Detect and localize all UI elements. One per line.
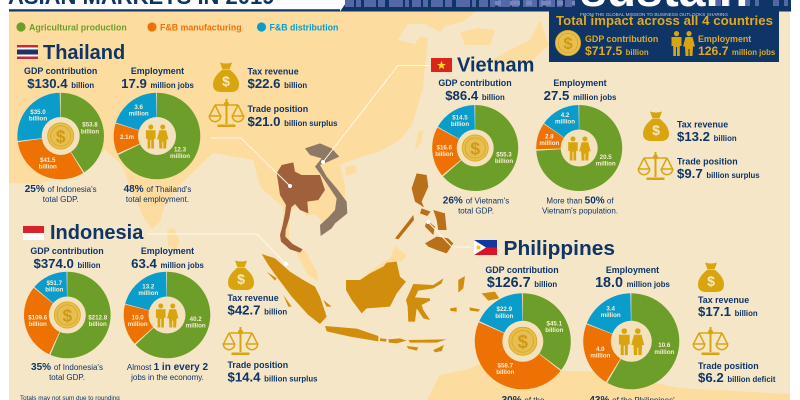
- employment label: Employment: [131, 66, 184, 76]
- tax revenue: $22.6: [248, 76, 284, 91]
- icon: money bag: [228, 260, 254, 290]
- donut labels: employment: 13.2: [142, 284, 154, 290]
- trade position: billion deficit: [727, 375, 776, 384]
- employment note: 48% of Thailand's: [124, 184, 191, 195]
- donut labels: GDP: billion: [435, 151, 454, 158]
- GDP value: $126.7 billion: [487, 275, 557, 291]
- GDP note: 26% of Vietnam's: [443, 196, 509, 206]
- legend: [16, 22, 338, 32]
- donut labels: GDP: $212.8: [88, 314, 107, 322]
- donut labels: employment: 3.4: [606, 306, 615, 312]
- map: Sri Lanka, Hainan and Taiwan: [167, 130, 423, 250]
- skyline: [345, 0, 788, 7]
- trade position: billion surplus: [706, 171, 760, 180]
- tax revenue: $13.2: [677, 129, 714, 144]
- trade position: billion surplus: [284, 119, 338, 128]
- flag: Indonesia: [23, 226, 44, 240]
- donut: employment: [124, 272, 210, 358]
- panel: Philippines: [474, 238, 776, 400]
- donut labels: employment: 10.6: [658, 342, 670, 349]
- donut labels: GDP: $35.0: [30, 109, 46, 116]
- tax revenue: $17.1: [698, 304, 735, 319]
- donut: GDP: [17, 93, 104, 179]
- leader lines: [147, 66, 470, 266]
- icon: coin: [555, 30, 581, 56]
- icon: money bag: [698, 262, 724, 292]
- donut: employment: [114, 93, 200, 179]
- employment note: total employment.: [126, 195, 189, 204]
- donut labels: employment: million: [555, 119, 575, 126]
- donut labels: GDP: $55.3: [496, 152, 512, 158]
- donut labels: GDP: $22.9: [497, 306, 512, 313]
- donut labels: employment: 4.2: [561, 112, 569, 119]
- donut labels: GDP: billion: [29, 116, 47, 122]
- donut labels: GDP: billion: [451, 121, 469, 128]
- total GDP value: $717.5 billion: [585, 44, 649, 58]
- employment value: 17.9 million jobs: [121, 76, 194, 91]
- GDP note: 35% of Indonesia's: [31, 362, 103, 373]
- trade position: Trade position: [698, 361, 759, 371]
- trade position: $21.0: [248, 114, 284, 129]
- icon: money bag: [643, 112, 669, 141]
- heading: Indonesia: Indonesia: [50, 222, 144, 244]
- donut labels: employment: million: [654, 349, 674, 356]
- tax revenue: Tax revenue: [228, 293, 279, 303]
- donut: GDP: [475, 293, 571, 389]
- donut labels: GDP: billion: [81, 128, 99, 135]
- donut labels: GDP: $53.8: [82, 122, 98, 128]
- donut labels: GDP: billion: [495, 313, 514, 320]
- donut labels: GDP: billion: [496, 369, 515, 376]
- icon: scale: [693, 327, 728, 355]
- donut labels: employment: million: [128, 321, 148, 328]
- donut labels: employment: 10.0: [132, 314, 144, 322]
- icon: people: [672, 31, 695, 56]
- map: Thailand: [277, 162, 325, 253]
- map: Australia: [427, 356, 790, 400]
- trade position: Trade position: [248, 104, 308, 114]
- donut labels: GDP: [28, 280, 108, 328]
- donut labels: employment: 4.0: [596, 346, 605, 353]
- total GDP: GDP contribution: [585, 34, 658, 44]
- donut: employment: [583, 293, 679, 389]
- donut: GDP: [432, 105, 518, 191]
- trade position: $9.7: [677, 166, 706, 181]
- map: Philippines: [395, 173, 453, 253]
- donut labels: GDP: $41.5: [40, 157, 55, 164]
- donut labels: employment: [120, 104, 190, 160]
- legend: F&B manufacturing: [160, 22, 242, 32]
- employment note: jobs in the economy.: [130, 373, 204, 382]
- GDP note: total GDP.: [458, 206, 494, 216]
- map: Korea and Japan: [460, 20, 549, 64]
- donut labels: GDP: billion: [495, 158, 513, 165]
- donut labels: employment: 40.2: [190, 316, 202, 323]
- icon: scale: [638, 152, 673, 180]
- employment note: Vietnam's population.: [542, 206, 618, 216]
- flag: Vietnam: [431, 58, 452, 72]
- GDP note: total GDP.: [43, 195, 79, 204]
- tax revenue: billion: [735, 309, 758, 318]
- donut labels: employment: million: [138, 290, 158, 297]
- employment label: Employment: [553, 78, 607, 88]
- donut: employment: [536, 105, 622, 191]
- donut labels: employment: million: [129, 110, 149, 118]
- employment note: More than 50% of: [546, 196, 614, 206]
- tax revenue: Tax revenue: [698, 295, 749, 305]
- donut labels: employment: 2.8: [545, 134, 554, 140]
- employment label: Employment: [141, 246, 194, 256]
- map: Malay peninsula and north Borneo: [296, 246, 407, 282]
- tax revenue: billion: [714, 134, 737, 143]
- icon: scale: [209, 99, 244, 127]
- heading: Vietnam: Vietnam: [457, 54, 534, 76]
- GDP value: $86.4 billion: [445, 88, 505, 103]
- header: [0, 0, 791, 17]
- employment value: 63.4 million jobs: [131, 256, 204, 271]
- donut labels: employment: million: [170, 153, 190, 160]
- donut labels: GDP: $58.7: [498, 362, 513, 370]
- donut labels: employment: million: [590, 353, 610, 360]
- trade position: Trade position: [677, 156, 738, 166]
- donut labels: GDP: $45.1: [547, 320, 562, 328]
- donut labels: employment: [128, 284, 206, 330]
- employment label: Employment: [606, 265, 659, 275]
- trade position: $6.2: [698, 370, 727, 385]
- legend: Agricultural production: [29, 22, 127, 32]
- panel: Indonesia: [20, 222, 318, 400]
- GDP label: GDP contribution: [438, 78, 512, 88]
- employment value: 27.5 million jobs: [544, 88, 617, 103]
- tax revenue: Tax revenue: [248, 66, 299, 76]
- tax revenue: $42.7: [228, 302, 264, 317]
- donut labels: GDP: billion: [29, 321, 47, 328]
- donut labels: GDP: billion: [545, 327, 564, 334]
- GDP label: GDP contribution: [24, 66, 97, 76]
- donut labels: GDP: $14.5: [452, 114, 468, 122]
- GDP label: GDP contribution: [485, 265, 559, 275]
- donut labels: GDP: billion: [45, 286, 64, 294]
- donut labels: employment: million: [601, 312, 621, 319]
- employment value: 18.0 million jobs: [595, 275, 671, 291]
- GDP value: $374.0 billion: [34, 256, 101, 271]
- employment note: Almost 1 in every 2: [127, 362, 208, 373]
- trade position: $14.4: [228, 369, 264, 384]
- heading: total impact: Total impact across all 4 countries: [556, 13, 773, 28]
- panel: total impact: [549, 12, 779, 62]
- donut labels: employment: 3.6: [134, 104, 143, 111]
- subtitle: FROM THE GLOBAL MISSION TO BUSINESS OUTLOOKS SHARING: [580, 12, 728, 17]
- donut labels: GDP: [495, 306, 564, 376]
- donut labels: employment: million: [186, 323, 206, 330]
- panel: Thailand: [17, 42, 338, 204]
- donut labels: GDP: billion: [89, 321, 107, 328]
- donut labels: GDP: $109.6: [28, 314, 47, 322]
- flag: Philippines: [474, 240, 497, 255]
- tax revenue: Tax revenue: [677, 120, 728, 130]
- donut: GDP: [24, 272, 111, 358]
- donut labels: employment: [539, 112, 616, 168]
- donut labels: GDP: [29, 109, 99, 170]
- total employment value: 126.7 million jobs: [698, 44, 776, 58]
- GDP note: total GDP.: [49, 373, 85, 382]
- donut labels: GDP: [435, 114, 513, 165]
- trade position: Trade position: [228, 360, 288, 370]
- GDP value: $130.4 billion: [27, 76, 94, 91]
- heading: Philippines: Philippines: [504, 238, 615, 260]
- donut labels: GDP: billion: [39, 164, 57, 170]
- map: mainland Asia: [9, 11, 477, 245]
- GDP label: GDP contribution: [30, 246, 104, 256]
- tax revenue: billion: [284, 81, 307, 90]
- donut labels: employment: [590, 306, 674, 360]
- donut labels: employment: million: [596, 161, 616, 168]
- panel: Vietnam: [431, 54, 760, 216]
- map: Indonesia: [262, 254, 499, 352]
- icon: money bag: [213, 62, 239, 92]
- icon: scale: [223, 327, 258, 355]
- donut labels: GDP: $51.7: [47, 280, 62, 287]
- donut labels: employment: 2.1m: [120, 134, 135, 141]
- donut labels: employment: 20.5: [600, 154, 612, 161]
- donut labels: employment: million: [539, 140, 559, 147]
- GDP note: 25% of Indonesia's: [25, 184, 97, 195]
- donut labels: employment: 12.3: [174, 146, 186, 154]
- tax revenue: billion: [264, 307, 287, 316]
- total employment: Employment: [698, 34, 751, 44]
- map: Vietnam: [305, 143, 347, 236]
- donut labels: GDP: $16.6: [437, 144, 452, 152]
- heading: Thailand: Thailand: [43, 42, 125, 64]
- flag: Thailand: [17, 45, 38, 59]
- trade position: billion surplus: [264, 374, 318, 383]
- legend: F&B distribution: [270, 22, 338, 32]
